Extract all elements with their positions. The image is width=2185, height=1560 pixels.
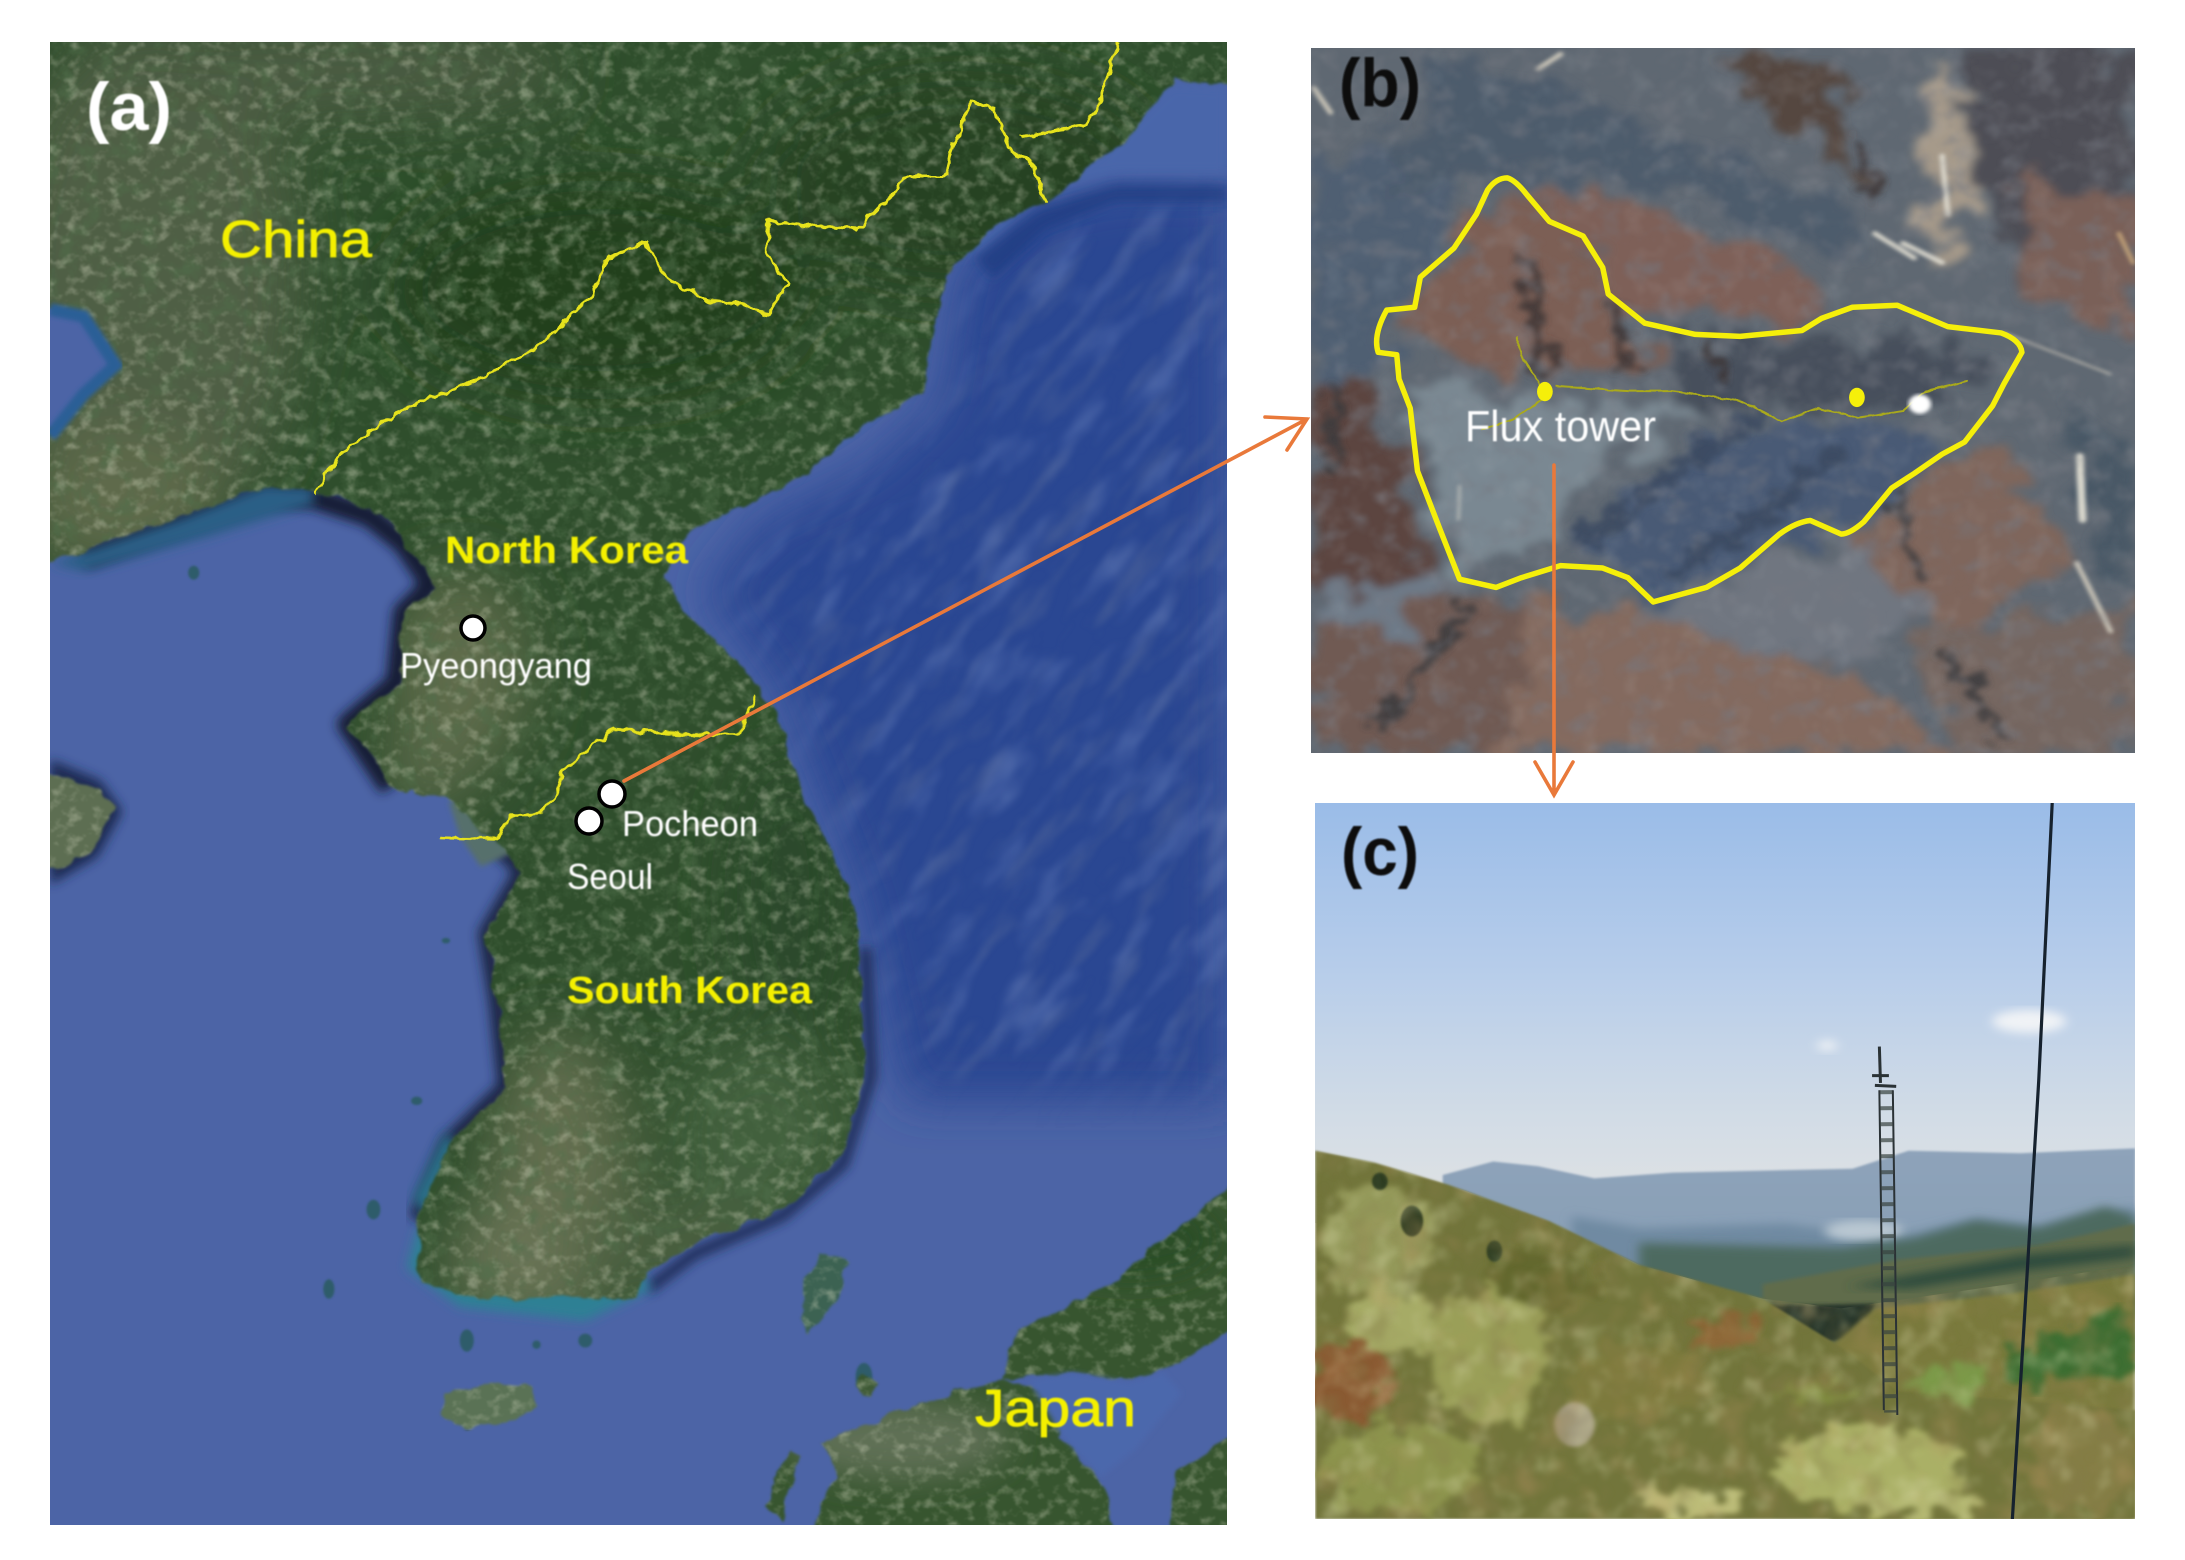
panel label (b): (b) xyxy=(1339,45,1421,121)
coastal shadow xyxy=(84,495,432,787)
label: North Korea: North Korea xyxy=(445,530,689,572)
valley haze xyxy=(1824,1220,1903,1241)
watershed boundary xyxy=(1377,178,2022,602)
second site dot xyxy=(1849,388,1865,407)
label: China: China xyxy=(220,211,372,269)
mid mountains xyxy=(1572,1207,2135,1313)
green conifers xyxy=(2010,1313,2133,1386)
label: Japan: Japan xyxy=(975,1380,1136,1438)
island specks xyxy=(188,566,872,1391)
land: China and Korea xyxy=(0,20,1227,1525)
border: DMZ xyxy=(441,696,755,838)
panel (b): watershed satellite image xyxy=(1311,45,2135,753)
land: Japan, Jeju, Tsushima and western island xyxy=(50,760,1227,1525)
border: China and North Korea xyxy=(314,43,1118,495)
city marker: Seoul xyxy=(576,808,602,834)
left forested hillside xyxy=(1315,1151,2135,1519)
panel (a): satellite map of the Korean peninsula xyxy=(50,42,1227,1525)
border lines xyxy=(314,43,1118,838)
label: Pyeongyang: Pyeongyang xyxy=(400,645,592,686)
sea xyxy=(50,42,1227,1525)
sea floor relief xyxy=(736,208,1227,1076)
panel label (a): (a) xyxy=(86,69,172,145)
foliage texture xyxy=(1315,1150,2135,1519)
stream network xyxy=(1482,336,1967,430)
city marker: Pyeongyang xyxy=(461,616,485,640)
label: Flux tower: Flux tower xyxy=(1465,402,1656,451)
flux tower dot xyxy=(1537,382,1553,401)
vegetation patches xyxy=(1314,1182,2139,1517)
inland sea xyxy=(1028,1373,1182,1477)
label: South Korea: South Korea xyxy=(567,970,813,1012)
panel label (c): (c) xyxy=(1341,814,1419,890)
valley conifers xyxy=(1763,1303,1875,1342)
panel (c): photograph of the flux tower xyxy=(1314,803,2139,1519)
sky xyxy=(1315,803,2135,1223)
city marker: Pocheon xyxy=(599,781,625,807)
northern shelf xyxy=(976,166,1201,251)
deep east sea xyxy=(704,188,1228,1101)
cable xyxy=(2012,803,2052,1519)
near right hills xyxy=(1639,1207,2135,1313)
arrow: flux tower to photograph xyxy=(1535,465,1573,795)
flux tower xyxy=(1872,1047,1897,1415)
terrain colour patches xyxy=(1311,49,2135,753)
far mountains xyxy=(1443,1148,2135,1265)
right slope xyxy=(1830,1274,2135,1519)
label: Seoul: Seoul xyxy=(567,856,653,897)
clouds xyxy=(1817,1010,2066,1050)
label: Pocheon: Pocheon xyxy=(622,803,758,844)
white clearing xyxy=(1909,394,1931,414)
arrow: Pocheon to watershed xyxy=(624,417,1307,781)
shallow teal coast xyxy=(407,1226,652,1321)
ridge streaks xyxy=(1331,151,2004,738)
